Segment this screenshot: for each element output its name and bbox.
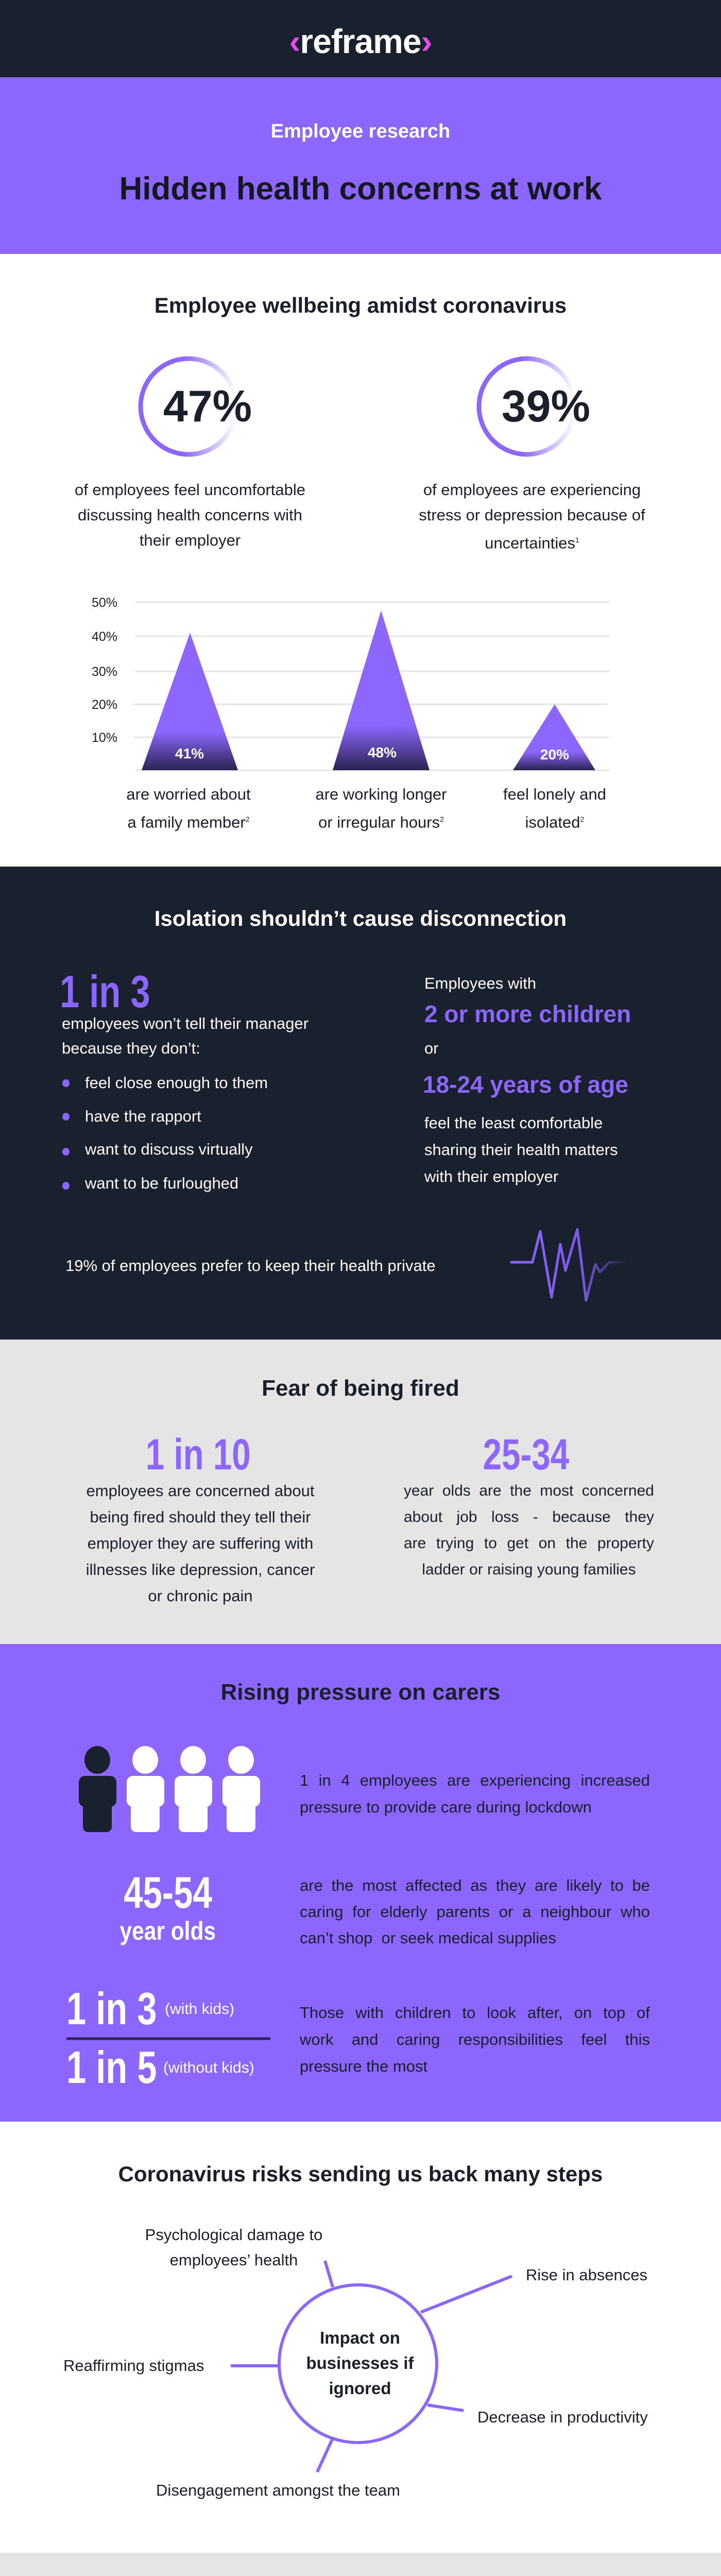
text: most affected xyxy=(300,1876,650,1947)
text: fired concern: illnesses like depression, cancer xyxy=(86,1561,315,1579)
bar chart xyxy=(92,596,610,770)
section: title band xyxy=(0,77,721,254)
diagram centre text xyxy=(306,2328,414,2398)
text: employees with children / age: 18-24 years of age xyxy=(423,1071,628,1098)
chart labels: feel lonely and xyxy=(503,785,606,803)
bar chart: 48% xyxy=(368,744,397,760)
chart labels: are working longer xyxy=(315,785,447,803)
bar chart: 41% xyxy=(175,745,204,761)
text: fired concern: or chronic pain xyxy=(148,1587,253,1605)
heading: carers: Rising pressure on carers xyxy=(221,1680,500,1705)
label: decrease productivity: Decrease in productivity xyxy=(477,2408,648,2426)
stat: 1 in 3 with kids: 1 in 3 xyxy=(66,1983,157,2034)
text: job loss xyxy=(404,1482,654,1578)
text: children pressure xyxy=(300,2004,650,2075)
text: employees with children / age: Employees with xyxy=(424,974,536,992)
subtitle: Employee research xyxy=(271,121,450,142)
text: employees with children / age: 2 or more children xyxy=(424,1001,631,1027)
icon: people (1 in 4) xyxy=(79,1746,260,1832)
bar chart: 10% xyxy=(92,731,117,745)
list: reasons: feel close enough to them xyxy=(85,1074,268,1092)
text: job loss: ladder or raising young families xyxy=(422,1561,636,1578)
bar chart: 20% xyxy=(540,747,569,762)
text: job loss: about job loss - because they xyxy=(404,1509,654,1526)
text: fired concern: employees are concerned about xyxy=(87,1482,314,1500)
text: job loss: are trying to get on the property xyxy=(404,1535,654,1552)
label: psychological damage xyxy=(145,2226,322,2269)
bar chart: 50% xyxy=(92,596,117,610)
diagram centre text: businesses if xyxy=(306,2353,414,2372)
text: won't tell manager: employees won’t tell their manager xyxy=(62,1014,308,1032)
text: 1 in 4 xyxy=(300,1771,650,1816)
chart labels: isolated2 xyxy=(525,813,584,831)
stat: 1 in 5 without kids xyxy=(66,2042,254,2093)
list: reasons: have the rapport xyxy=(85,1107,201,1125)
stat: 1 in 3: 1 in 3 xyxy=(60,966,150,1017)
stat: 45-54 year olds xyxy=(119,1868,216,1945)
chart labels: are worried about xyxy=(126,785,251,803)
bar chart: 40% xyxy=(92,630,117,644)
stat: 1 in 3 with kids xyxy=(66,1983,234,2034)
text: fired concern xyxy=(86,1482,315,1605)
text: won't tell manager: because they don’t: xyxy=(62,1039,200,1057)
section: tips panel xyxy=(0,2553,721,2576)
stat: 1 in 10: 1 in 10 xyxy=(146,1430,251,1479)
diagram centre text: ignored xyxy=(329,2379,391,2398)
section: isolation panel xyxy=(0,867,721,1340)
list: reasons: want to discuss virtually xyxy=(85,1140,253,1158)
stat: 45-54 year olds: year olds xyxy=(120,1917,216,1945)
bar chart: 20% xyxy=(92,698,117,712)
text: 19% private: 19% of employees prefer to keep their health private xyxy=(65,1257,436,1275)
diagram: impact circle and spokes xyxy=(231,2261,512,2472)
text: employees with children / age: sharing their health matters xyxy=(424,1141,618,1159)
label: psychological damage: Psychological damage to xyxy=(145,2226,322,2244)
section: risks panel xyxy=(0,2122,721,2553)
heading: risks: Coronavirus risks sending us back many steps xyxy=(118,2162,603,2186)
label: reaffirming stigmas: Reaffirming stigmas xyxy=(63,2357,204,2375)
icon: ring 47% xyxy=(141,359,236,454)
text: won't tell manager xyxy=(62,1014,308,1057)
text: children pressure: pressure the most xyxy=(300,2057,427,2075)
bar chart: 30% xyxy=(92,665,117,679)
icon: heartbeat xyxy=(510,1229,628,1300)
text: employees with children / age: with their employer xyxy=(424,1167,558,1185)
section: carers panel xyxy=(0,1644,721,2122)
text: 1 in 4: pressure to provide care during lockdown xyxy=(300,1798,592,1816)
text: children pressure: Those with children to look after, on top of xyxy=(300,2004,650,2022)
text: 1 in 4: 1 in 4 employees are experiencing increased xyxy=(300,1771,650,1789)
icon: ring 39% xyxy=(479,359,575,454)
stat: 1 in 3 with kids: (with kids) xyxy=(165,2001,234,2018)
text: children pressure: work and caring responsibilities feel this xyxy=(300,2030,650,2048)
section: fear panel xyxy=(0,1340,721,1644)
stat: 39%: 39% xyxy=(502,382,590,431)
chart labels: or irregular hours2 xyxy=(318,813,444,831)
text: most affected: are the most affected as they are likely to be xyxy=(300,1876,650,1894)
title: Hidden health concerns at work xyxy=(119,171,602,207)
text: fired concern: being fired should they tell their xyxy=(90,1508,311,1526)
stat: 1 in 5 without kids: (without kids) xyxy=(163,2059,254,2076)
text: employees with children / age: feel the least comfortable xyxy=(424,1114,603,1132)
chart labels xyxy=(126,785,606,831)
heading: isolation: Isolation shouldn’t cause disconnection xyxy=(154,906,566,930)
label: disengagement: Disengagement amongst the team xyxy=(156,2481,400,2499)
text: most affected: caring for elderly parents or a neighbour who xyxy=(300,1903,650,1921)
text: employees with children / age: or xyxy=(424,1039,439,1057)
text: fired concern: employer they are suffering with xyxy=(88,1534,313,1552)
heading: wellbeing: Employee wellbeing amidst coronavirus xyxy=(154,293,566,317)
text: employees with children / age xyxy=(423,974,631,1185)
section: wellbeing panel xyxy=(0,254,721,867)
stat: 25-34: 25-34 xyxy=(483,1430,569,1479)
label: rise in absences: Rise in absences xyxy=(526,2266,647,2284)
text: most affected: can’t shop or seek medical supplies xyxy=(300,1929,556,1947)
label: psychological damage: employees’ health xyxy=(170,2251,298,2269)
text: 39% caption: of employees are experiencing stress or depression because of uncertainties1 xyxy=(419,481,645,552)
divider: with/without kids xyxy=(66,2037,270,2040)
logo: header: ‹reframe› xyxy=(289,22,432,60)
stat: 47%: 47% xyxy=(163,382,252,431)
text: 47% caption: of employees feel uncomfortable discussing health concerns with their employer xyxy=(75,481,305,549)
list: reasons xyxy=(62,1074,268,1192)
text: job loss: year olds are the most concerned xyxy=(404,1482,654,1499)
diagram centre text: Impact on xyxy=(320,2328,400,2347)
stat: 1 in 5 without kids: 1 in 5 xyxy=(66,2042,157,2093)
list: reasons: want to be furloughed xyxy=(85,1174,238,1192)
heading: fear: Fear of being fired xyxy=(262,1376,459,1401)
chart labels: a family member2 xyxy=(128,813,249,831)
stat: 45-54 year olds: 45-54 xyxy=(124,1868,212,1918)
section: header bar xyxy=(0,0,721,77)
